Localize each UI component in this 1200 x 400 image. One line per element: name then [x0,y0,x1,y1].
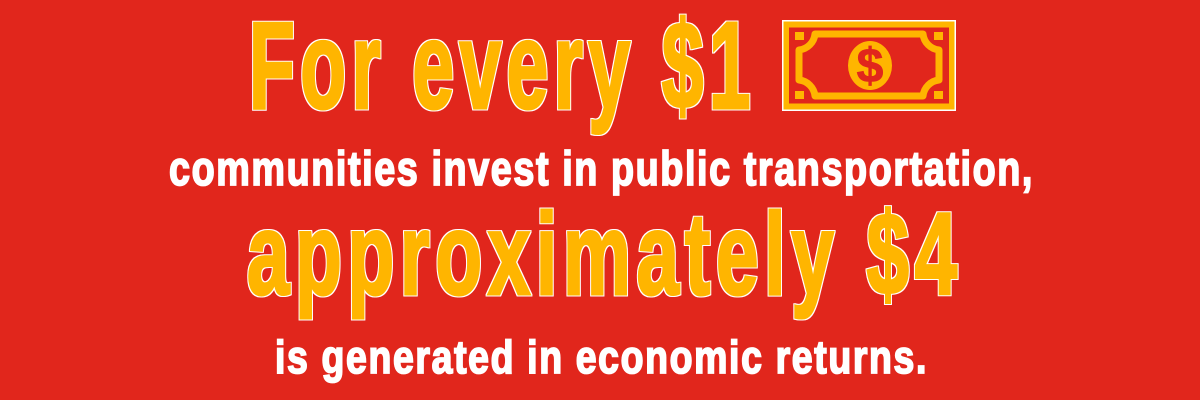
icon: dollar bill: $ [857,40,884,93]
icon: dollar bill [782,20,956,111]
text: economic returns line: is generated in economic returns. [275,331,928,383]
heading: For every $1: For every $1 [249,0,756,135]
